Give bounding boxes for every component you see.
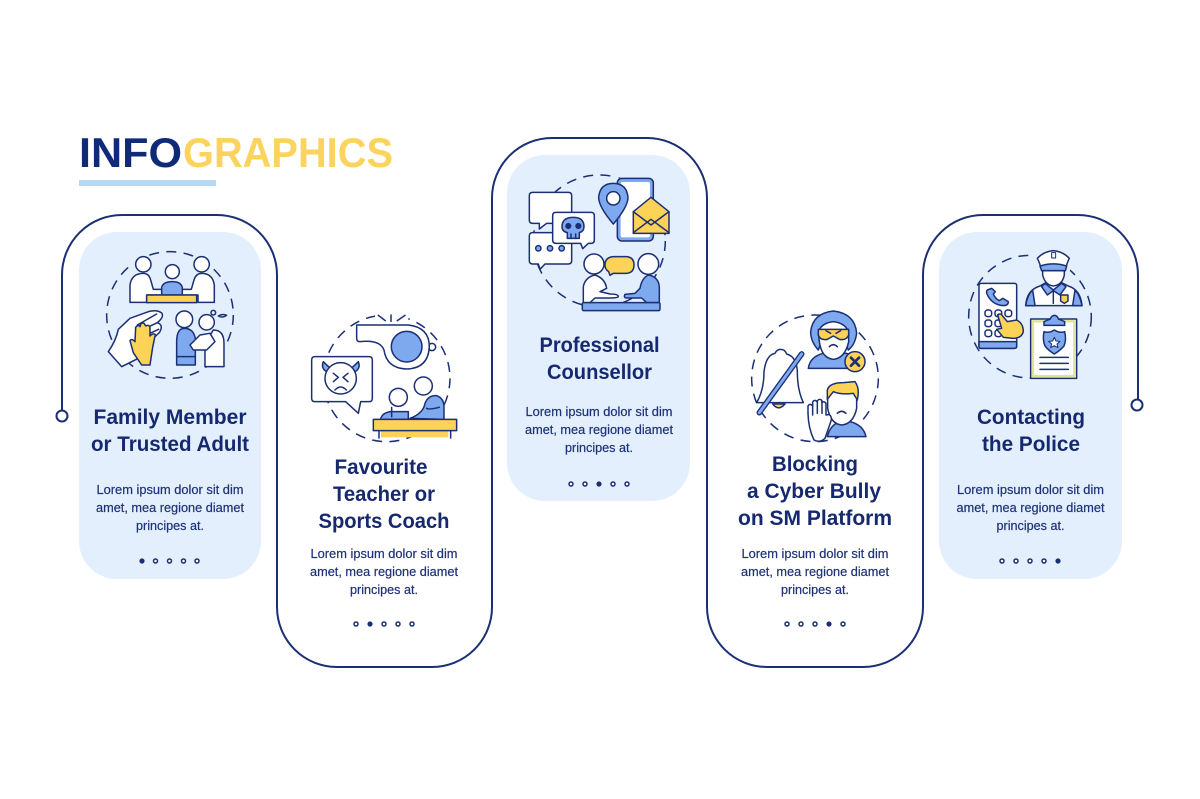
connecting outline [56, 138, 1142, 667]
heading [318, 456, 450, 533]
body text: amet, mea regione diamet [525, 423, 674, 437]
body text: amet, mea regione diamet [956, 501, 1105, 515]
body text: amet, mea regione diamet [310, 565, 459, 579]
heading: or Trusted Adult [91, 433, 249, 456]
body text: principes at. [996, 519, 1064, 533]
body text: principes at. [781, 583, 849, 597]
pagination dots [569, 481, 629, 487]
panel: blocking a cyber bully [738, 311, 892, 627]
heading: Family Member [94, 406, 246, 429]
body text: principes at. [565, 441, 633, 455]
body text [956, 483, 1105, 533]
body text: Lorem ipsum dolor sit dim [310, 547, 458, 561]
icon: whistle and teacher [312, 310, 457, 442]
heading: Sports Coach [318, 510, 450, 533]
heading: Favourite [334, 456, 428, 479]
heading: Professional [540, 334, 660, 357]
heading: Counsellor [547, 361, 652, 384]
panel: contacting the police [939, 232, 1122, 579]
title: GRAPHICS [183, 129, 393, 176]
card background [507, 155, 690, 501]
icon: blocked bully and muted bell [752, 311, 878, 442]
heading [91, 406, 249, 456]
heading: Teacher or [333, 483, 435, 506]
icon: police, phone and report [969, 251, 1091, 378]
body text: Lorem ipsum dolor sit dim [957, 483, 1104, 497]
panel: professional counsellor [507, 155, 690, 501]
pagination dots [785, 621, 845, 627]
card background [939, 232, 1122, 579]
body text: Lorem ipsum dolor sit dim [526, 405, 672, 419]
heading: Blocking [772, 453, 858, 476]
icon: counselling and messages [529, 173, 669, 311]
pagination dots [354, 621, 414, 627]
body text [310, 547, 459, 597]
heading [977, 406, 1085, 456]
icon: family and trusted adult [107, 252, 233, 378]
heading: on SM Platform [738, 507, 892, 530]
card background [79, 232, 261, 579]
body text: principes at. [350, 583, 418, 597]
heading [738, 453, 892, 530]
title [79, 129, 393, 186]
body text: amet, mea regione diamet [96, 501, 245, 515]
heading: a Cyber Bully [747, 480, 881, 503]
panel: teacher or coach [310, 310, 459, 627]
body text: Lorem ipsum dolor sit dim [742, 547, 888, 561]
title: INFO [79, 129, 182, 176]
body text [96, 483, 245, 533]
pagination dots [1000, 558, 1061, 564]
pagination dots [139, 558, 199, 564]
body text: amet, mea regione diamet [741, 565, 890, 579]
body text: principes at. [136, 519, 204, 533]
heading [540, 334, 660, 384]
heading: the Police [982, 433, 1080, 456]
body text [741, 547, 890, 597]
panel: family member [79, 232, 261, 579]
body text: Lorem ipsum dolor sit dim [96, 483, 244, 497]
heading: Contacting [977, 406, 1085, 429]
body text [525, 405, 674, 455]
